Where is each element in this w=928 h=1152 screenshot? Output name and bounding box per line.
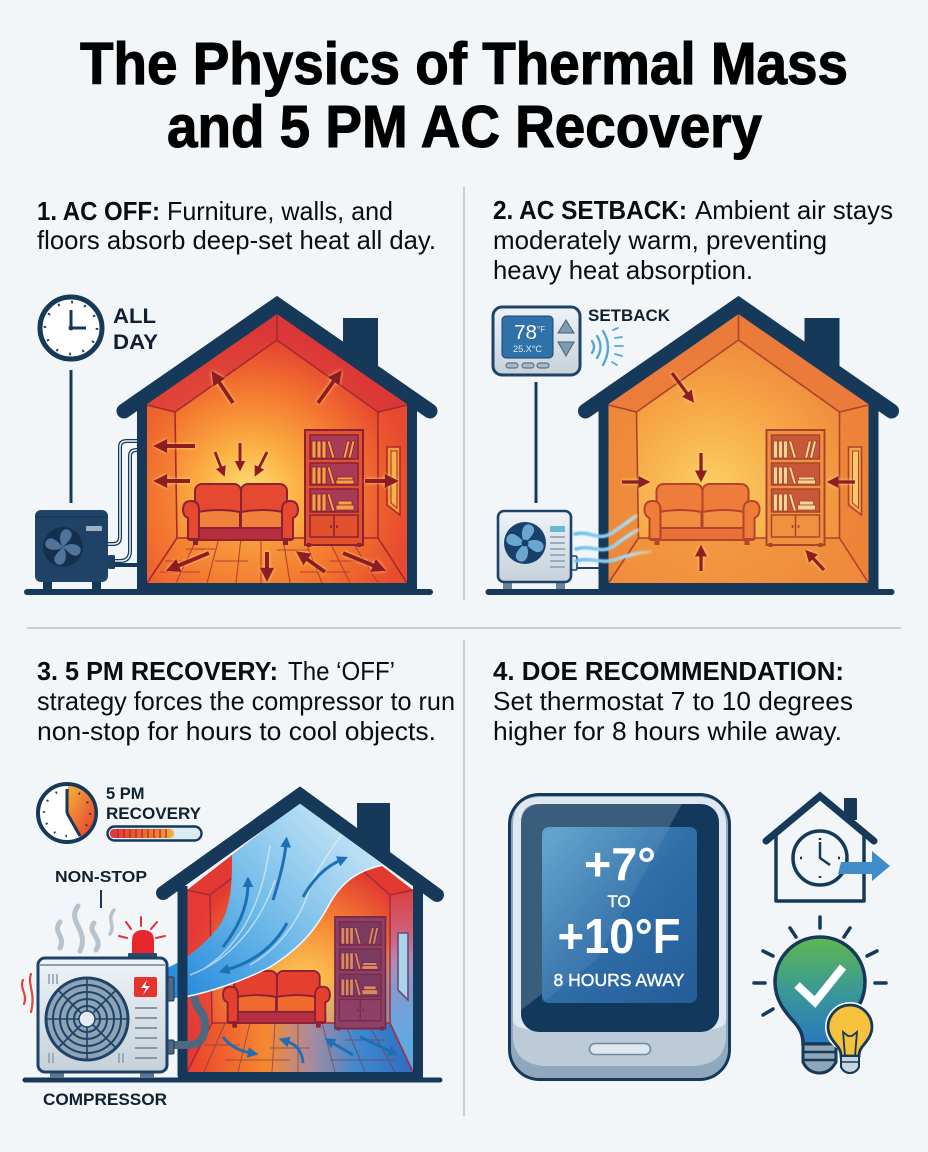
house: heat absorbing [27,300,430,592]
progress bar [108,826,202,840]
bookshelf [305,430,363,547]
text block: step 4 [493,656,853,746]
window [387,447,400,515]
title: The Physics of Thermal Mass [80,31,848,97]
panel: AC setback [488,195,893,592]
text block: step 2: Ambient air stays [695,195,893,225]
window [848,447,862,515]
label: 5 PM recovery: 5 PM [106,785,145,803]
label: 5 PM recovery: RECOVERY [106,805,201,823]
label: compressor: COMPRESSOR [43,1091,167,1109]
text block: step 3 [37,656,455,746]
readout [554,838,685,990]
icon: clock all day [40,297,102,359]
floor boards [160,538,378,583]
label: all day: DAY [113,330,158,354]
text block: step 3: 3. 5 PM RECOVERY: [37,656,278,686]
title: and 5 PM AC Recovery [167,94,762,160]
icon: setback thermostat: °F [537,325,545,334]
label: setback: SETBACK [588,307,670,325]
readout: TO [607,892,631,911]
small yellow bulb [825,1002,875,1073]
text block: step 1: floors absorb deep-set heat all day. [37,225,436,255]
icon: efficiency bulb with check [754,917,886,1073]
icon: refrigerant pipes [108,441,137,565]
label: 5 PM recovery [106,785,201,823]
text block: step 3: The ‘OFF’ [288,656,395,686]
icon: setback thermostat: 78 [514,322,537,344]
arrows: light heat flow [622,373,855,571]
text block: step 4: 4. DOE RECOMMENDATION: [493,656,844,686]
icon: setback thermostat [493,307,580,375]
house: moderately warm [488,300,892,592]
icon: cool air [575,516,650,561]
panel: AC off [27,196,436,592]
sofa [223,971,330,1028]
readout: +7° [584,838,656,890]
readout: 8 HOURS AWAY [554,970,685,990]
text block: step 1: 1. AC OFF: [37,196,160,226]
text block: step 2 [493,195,893,285]
bookshelf [766,430,824,547]
text block: step 2: 2. AC SETBACK: [493,195,687,225]
label: all day [113,304,158,354]
text block: step 2: heavy heat absorption. [493,255,753,285]
window [398,933,408,1000]
icon: setback thermostat: 25.X°C [513,344,542,354]
icon: outdoor unit off [35,510,115,589]
title [80,31,848,160]
panel: DOE recommendation [493,656,890,1080]
icon: large thermostat [510,794,730,1080]
icon: steam [57,906,114,951]
icon: away house with clock [766,796,890,901]
house outline [25,795,440,1080]
text block: step 4: Set thermostat 7 to 10 degrees [493,686,853,716]
arrows: cold air flow [223,844,392,1063]
icon: outdoor unit setback [498,511,600,589]
icon: heat squiggles [22,974,33,1012]
icon: compressor unit [38,958,205,1078]
text block: step 2: moderately warm, preventing [493,225,827,255]
panel: 5 PM recovery [22,656,455,1109]
text block: step 1: Furniture, walls, and [167,196,393,226]
text block: step 4: higher for 8 hours while away. [493,716,842,746]
icon: recovery clock [38,784,96,842]
arrows: heat flow [163,378,389,572]
text block: step 3: non-stop for hours to cool objects. [37,716,436,746]
label: all day: ALL [113,304,156,328]
readout: +10°F [558,910,680,964]
bookshelf [335,917,385,1030]
house: cooling down [25,795,440,1080]
text block: step 3: strategy forces the compressor to run [37,686,455,716]
label: non-stop: NON-STOP [55,869,147,886]
cold air swoosh [167,802,383,1000]
icon: alarm beacon [119,917,165,959]
icon: signal waves [592,328,623,365]
sofa [183,484,298,545]
sofa [644,484,760,545]
text block: step 1 [37,196,436,255]
